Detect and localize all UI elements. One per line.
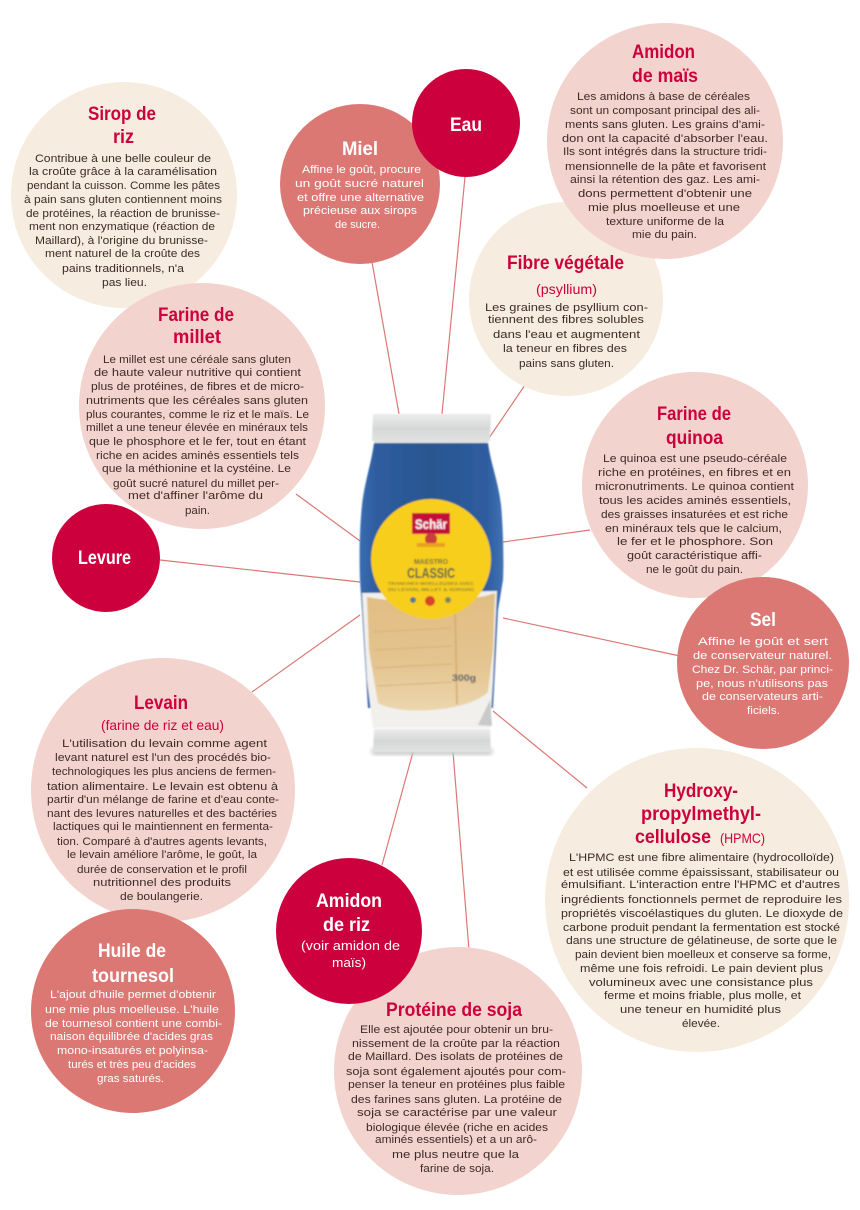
heading: Farine de millet: Farine de — [158, 305, 234, 326]
text: HPMC: même une fois refroidi. Le pain devient plus — [580, 963, 824, 975]
panel: Farine de quinoa — [582, 372, 808, 598]
text: Farine de millet: que le phosphore et le fer, tout en étant — [89, 436, 306, 448]
heading: Sirop de riz: riz — [113, 127, 134, 148]
heading: Huile de tournesol — [92, 941, 174, 987]
text: Sel: pe, nous n'utilisons pas — [696, 678, 829, 690]
Schär logo: Schär — [415, 516, 447, 532]
text: Miel — [295, 164, 424, 231]
panel: Sel — [677, 577, 849, 749]
text: Protéine de soja: nissement de la croûte par la réaction — [352, 1038, 560, 1050]
text: Farine de millet: met d'affiner l'arôme du — [128, 490, 263, 502]
text: HPMC: carbone produit pendant la fermentation est stocké — [563, 922, 840, 934]
Schär logo — [412, 513, 450, 547]
heading: Eau: Eau — [450, 115, 482, 136]
text: Sel: Chez Dr. Schär, par princi- — [692, 664, 833, 676]
text: Farine de millet: Le millet est une céréale sans gluten — [103, 354, 291, 366]
text: Farine de quinoa: en minéraux tels que le calcium, — [605, 523, 782, 535]
text: HPMC — [561, 852, 843, 1030]
text: Farine de quinoa: micronutriments. Le quinoa contient — [595, 481, 794, 493]
text: Levain: nutritionnel des produits — [93, 877, 232, 889]
text: Levain: le levain améliore l'arôme, le goût, la — [67, 849, 258, 861]
text: Farine de quinoa: le fer et le phosphore. Son — [617, 536, 773, 548]
text: Amidon de maïs — [562, 91, 768, 241]
text: Sirop de riz: pendant la cuisson. Comme les pâtes — [27, 180, 221, 192]
text: Levain: de boulangerie. — [120, 891, 203, 903]
text: Sirop de riz — [24, 153, 223, 289]
text: Miel: précieuse aux sirops — [303, 205, 418, 217]
text: Farine de millet: riche en acides aminés essentiels tels — [96, 450, 300, 462]
text: Huile de tournesol: L'ajout d'huile permet d'obtenir — [50, 989, 216, 1001]
text: Farine de millet: nutriments que les céréales sans gluten — [86, 395, 308, 407]
heading: Farine de quinoa: Farine de — [657, 404, 731, 425]
text: Protéine de soja: de Maillard. Des isolats de protéines de — [348, 1051, 563, 1063]
panel: Huile de tournesol — [31, 909, 235, 1113]
heading: Protéine de soja: Protéine de soja — [386, 1000, 522, 1021]
text: Amidon de maïs: ments sans gluten. Les grains d'ami- — [565, 119, 765, 131]
text: Farine de millet: de haute valeur nutritive qui contient — [94, 367, 301, 379]
text: HPMC: émulsifiant. L'interaction entre l'HPMC et d'autres — [561, 879, 841, 891]
heading: Fibre végétale: Fibre végétale — [507, 253, 624, 274]
text: Huile de tournesol: turés et très peu d'acides — [68, 1059, 197, 1071]
note: voir amidon de maïs — [301, 938, 400, 970]
heading: Sirop de riz — [88, 104, 156, 148]
text: Sirop de riz: de protéines, la réaction de brunisse- — [26, 208, 220, 220]
text: HPMC: ingrédients fonctionnels permet de reproduire les — [561, 894, 843, 906]
text: Sel: de conservateur naturel. — [693, 650, 832, 662]
text: Farine de millet: plus courantes, comme le riz et le maïs. Le — [86, 409, 309, 421]
text: Levain: L'utilisation du levain comme agent — [62, 738, 267, 750]
text: Huile de tournesol — [45, 989, 222, 1085]
text: Protéine de soja: des farines sans gluten. La protéine de — [351, 1094, 562, 1106]
heading: HPMC: cellulose — [635, 827, 711, 848]
text: HPMC: pain devient bien moelleux et conserve sa forme, — [575, 949, 831, 961]
panel: Eau — [412, 69, 520, 177]
note: voir amidon de maïs: maïs) — [332, 955, 366, 970]
text: Miel: Affine le goût, procure — [302, 164, 421, 176]
text: Sel: ficiels. — [747, 705, 780, 717]
text: Protéine de soja: biologique élevée (riche en acides — [366, 1122, 549, 1134]
text: Protéine de soja: penser la teneur en protéines plus faible — [348, 1079, 565, 1091]
heading: Miel: Miel — [342, 139, 378, 160]
package shadow — [372, 748, 492, 755]
text: Farine de quinoa: riche en protéines, en fibres et en — [598, 467, 791, 479]
text: HPMC: ferme et moins friable, plus molle, et — [604, 990, 801, 1002]
text: Farine de quinoa — [595, 453, 794, 576]
text: Amidon de maïs: texture uniforme de la — [606, 216, 725, 228]
label text: MAESTRO — [414, 559, 449, 566]
heading: Fibre végétale: (psyllium) — [536, 281, 597, 297]
text: Fibre végétale — [485, 302, 648, 370]
heading: Sirop de riz: Sirop de — [88, 104, 156, 125]
text: Sirop de riz: pains traditionnels, n'a — [62, 263, 185, 275]
heading: Farine de quinoa — [657, 404, 731, 449]
text: Protéine de soja: soja se caractérise par une valeur — [357, 1107, 557, 1119]
package bottom seal — [373, 729, 491, 752]
label text — [388, 559, 475, 606]
text: Sirop de riz: ment non enzymatique (réaction de — [29, 221, 215, 233]
heading: Farine de millet: millet — [173, 327, 222, 348]
heading: Farine de millet — [158, 305, 234, 348]
text: HPMC: et est utilisée comme épaississant, stabilisateur ou — [563, 867, 839, 879]
heading: Fibre végétale — [507, 253, 624, 297]
text: Amidon de maïs: sont un composant principal des ali- — [570, 105, 760, 117]
connector lines from ingredients to product — [160, 177, 680, 950]
text: Fibre végétale: pains sans gluten. — [519, 358, 614, 370]
heading: HPMC: (HPMC) — [720, 830, 765, 846]
package blue body — [360, 443, 503, 708]
text: Protéine de soja: Elle est ajoutée pour obtenir un bru- — [360, 1024, 553, 1036]
package top seal — [372, 414, 491, 443]
transparent window with bread — [362, 591, 497, 728]
label text: TRANCHES MOELLEUSES AVEC — [388, 581, 475, 586]
text: Farine de millet: millet a une teneur élevée en minéraux tels — [86, 422, 309, 434]
heading: Levain: (farine de riz et eau) — [101, 717, 224, 733]
label text: DU LEVAIN, MILLET & SORGHO — [388, 587, 475, 592]
text: Protéine de soja — [346, 1024, 566, 1175]
text: Miel: de sucre. — [335, 219, 380, 231]
text: Sirop de riz: la croûte grâce à la caramélisation — [29, 166, 217, 178]
text: Levain: technologiques les plus anciens de fermen- — [52, 766, 276, 778]
text: Sirop de riz: ment naturel de la croûte des — [45, 248, 201, 260]
panel: Amidon de riz — [276, 858, 422, 1004]
product: bread package — [360, 414, 503, 755]
text: Amidon de maïs: mensionnelle de la pâte et favorisent — [565, 161, 766, 173]
heading: Huile de tournesol: tournesol — [92, 966, 174, 987]
text: Levain — [47, 738, 279, 903]
text: Miel: et offre une alternative — [297, 192, 424, 204]
text: Huile de tournesol: naison équilibrée d'acides gras — [50, 1031, 214, 1043]
text: Sirop de riz: à pain sans gluten contiennent moins — [24, 194, 223, 206]
text: Farine de quinoa: Le quinoa est une pseudo-céréale — [603, 453, 787, 465]
heading: Sel: Sel — [750, 610, 776, 631]
text: Fibre végétale: tiennent des fibres solubles — [488, 314, 645, 326]
text: Farine de quinoa: tous les acides aminés essentiels, — [599, 495, 791, 507]
panel: Levain — [31, 658, 295, 922]
text: Levain: lactiques qui le maintiennent en fermenta- — [53, 821, 273, 833]
text: Levain: partir d'un mélange de farine et d'eau conte- — [47, 794, 279, 806]
heading: HPMC: Hydroxy- — [664, 781, 738, 802]
text: Amidon de maïs: don ont la capacité d'absorber l'eau. — [562, 133, 768, 145]
heading: Amidon de maïs — [632, 42, 698, 87]
heading: Levain: Levain — [134, 693, 188, 714]
panel: Miel — [280, 104, 440, 264]
text: Amidon de maïs: Ils sont intégrés dans la structure tridi- — [563, 146, 767, 158]
text: Sirop de riz: Maillard), à l'origine du brunisse- — [35, 235, 208, 247]
text: Protéine de soja: farine de soja. — [420, 1163, 494, 1175]
panel: Levure — [52, 504, 160, 612]
text: Levain: tion. Comparé à d'autres agents levants, — [57, 836, 267, 848]
panel: Fibre végétale — [469, 202, 663, 396]
text: Farine de quinoa: ne le goût du pain. — [646, 564, 743, 576]
heading: Amidon de riz — [316, 891, 382, 936]
heading: Amidon de maïs: de maïs — [632, 66, 698, 87]
panel: Farine de millet — [79, 283, 325, 529]
text: Farine de millet: plus de protéines, de fibres et de micro- — [91, 381, 304, 393]
text: Levain: durée de conservation et le profil — [77, 864, 247, 876]
text: Sel — [692, 636, 833, 717]
text: Farine de millet: que la méthionine et la cystéine. Le — [102, 463, 291, 475]
text: Farine de millet — [86, 354, 309, 517]
heading: Huile de tournesol: Huile de — [98, 941, 166, 962]
heading: Amidon de maïs: Amidon — [632, 42, 695, 63]
heading: Levure: Levure — [78, 548, 131, 569]
text: Huile de tournesol: une mie plus moelleuse. L'huile — [45, 1004, 219, 1016]
text: Sirop de riz: Contribue à une belle couleur de — [35, 153, 211, 165]
heading: Amidon de riz: Amidon — [316, 891, 382, 912]
text: Huile de tournesol: gras saturés. — [97, 1073, 164, 1085]
panel: Sirop de riz — [11, 82, 237, 308]
text: HPMC: élevée. — [682, 1018, 720, 1030]
note: voir amidon de maïs: (voir amidon de — [301, 938, 400, 953]
text: Huile de tournesol: de tournesol contient une combi- — [45, 1018, 222, 1030]
text: HPMC: L'HPMC est une fibre alimentaire (hydrocolloïde) — [569, 852, 834, 864]
heading: HPMC — [635, 781, 765, 848]
text: Amidon de maïs: Les amidons à base de céréales — [577, 91, 751, 103]
label text: CLASSIC — [407, 565, 455, 582]
heading: Farine de quinoa: quinoa — [666, 428, 723, 449]
text: Amidon de maïs: dons permettent d'obtenir une — [578, 188, 752, 200]
text: Sel: Affine le goût et sert — [698, 636, 828, 648]
heading: HPMC: propylmethyl- — [641, 804, 761, 825]
text: Protéine de soja: me plus neutre que la — [392, 1149, 520, 1161]
text: Fibre végétale: dans l'eau et augmentent — [493, 329, 640, 341]
text: Levain: nant des levures naturelles et des bactéries — [47, 808, 278, 820]
text: HPMC: propriétés viscoélastiques du gluten. Le dioxyde de — [561, 908, 843, 920]
text: Farine de millet: pain. — [185, 505, 210, 517]
text: Farine de millet: goût sucré naturel du millet per- — [113, 478, 279, 490]
heading: Amidon de riz: de riz — [323, 915, 370, 936]
panel: Amidon de maïs — [547, 23, 783, 259]
text: Sel: de conservateurs arti- — [702, 691, 823, 703]
weight: 300g — [452, 673, 476, 683]
yellow label — [371, 499, 491, 619]
text: HPMC: dans une structure de gélatineuse, de sorte que le — [566, 935, 837, 947]
text: Protéine de soja: aminés essentiels) et a un arô- — [375, 1134, 537, 1146]
text: Levain: tation alimentaire. Le levain est obtenu à — [47, 781, 279, 793]
text: Fibre végétale: Les graines de psyllium con- — [485, 302, 648, 314]
text: Huile de tournesol: mono-insaturés et polyinsa- — [57, 1045, 208, 1057]
text: Fibre végétale: la teneur en fibres des — [503, 343, 628, 355]
panel: Protéine de soja — [334, 947, 582, 1195]
text: Farine de quinoa: goût caractéristique affi- — [627, 550, 762, 562]
text: Amidon de maïs: mie du pain. — [632, 229, 697, 241]
text: Levain: levant naturel est l'un des procédés bio- — [55, 752, 271, 764]
text: Farine de quinoa: des graisses insaturées et est riche — [601, 509, 788, 521]
text: Miel: un goût sucré naturel — [295, 178, 424, 190]
text: HPMC: une teneur en humidité plus — [620, 1004, 782, 1016]
text: HPMC: volumineux avec une consistance plus — [589, 977, 814, 989]
text: Sirop de riz: pas lieu. — [102, 277, 147, 289]
panel: Hydroxypropylmethylcellulose — [545, 748, 849, 1052]
text: Protéine de soja: soja sont également ajoutés pour com- — [346, 1066, 566, 1078]
text: Amidon de maïs: ainsi la rétention des gaz. Les ami- — [570, 174, 760, 186]
heading: Levain — [101, 693, 224, 733]
text: Amidon de maïs: mie plus moelleuse et une — [588, 202, 740, 214]
